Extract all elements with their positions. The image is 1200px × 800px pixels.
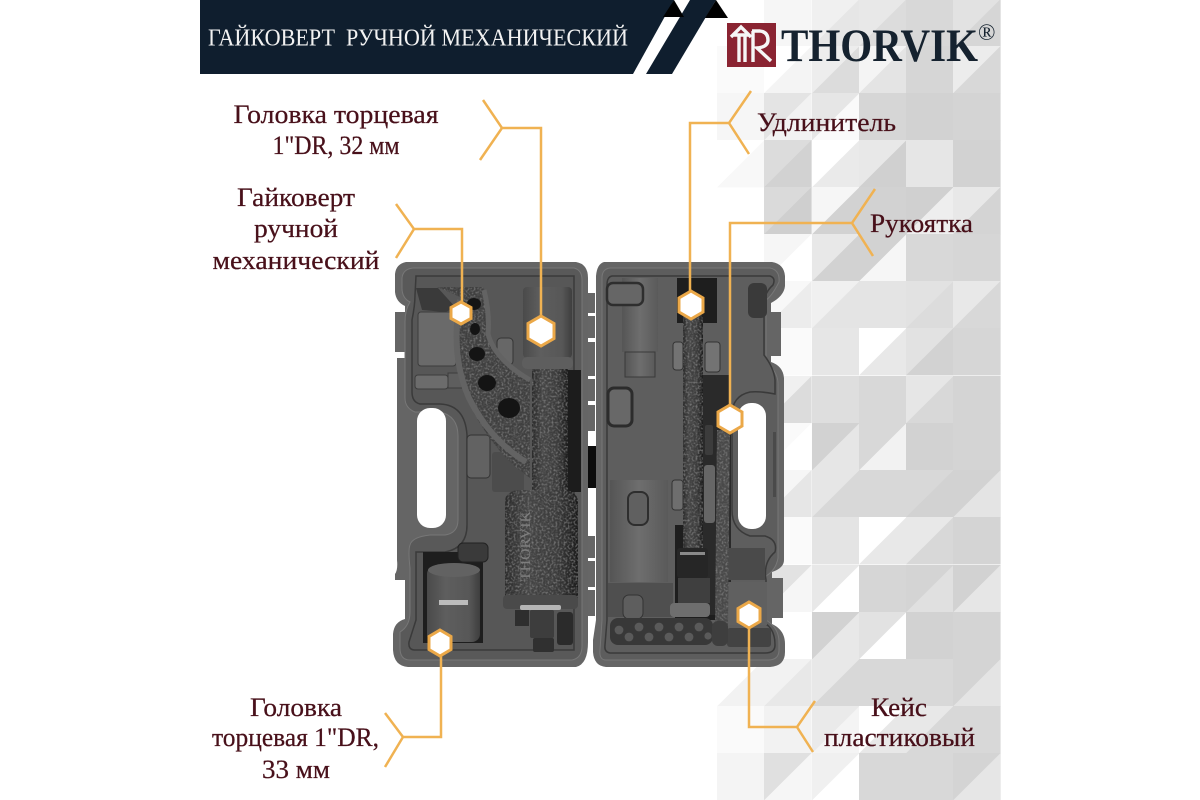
logo: Thorvik: THORVIK	[781, 20, 978, 72]
callout: socket 33 mm	[212, 630, 451, 784]
callout: socket 33 mm: торцевая 1"DR,	[212, 723, 379, 752]
callout: plastic case: пластиковый	[824, 723, 975, 752]
hydraulic arc plate	[437, 287, 530, 478]
callout: wrench: Гайковерт	[237, 183, 355, 212]
callout: handle: Рукоятка	[870, 209, 973, 238]
callout: handle	[718, 189, 973, 433]
knurled grip	[610, 618, 713, 645]
wrench shaft	[532, 369, 568, 494]
right case half	[593, 262, 785, 667]
socket imprints	[622, 278, 658, 352]
wrench square drive	[530, 610, 554, 638]
wrench cylinder	[505, 490, 578, 598]
callout: socket 32 mm: 1"DR, 32 мм	[272, 131, 400, 160]
hinges	[587, 293, 595, 616]
callout: wrench: механический	[212, 246, 380, 275]
callout: extension: Удлинитель	[757, 108, 896, 137]
left case half: THORVIK	[518, 511, 534, 581]
logo: Thorvik: ®	[978, 20, 995, 45]
right block floor	[727, 548, 765, 580]
callout: wrench	[212, 183, 471, 324]
callout: socket 32 mm	[234, 100, 554, 346]
callout: extension	[679, 91, 896, 319]
handle hole	[417, 408, 446, 528]
callout: plastic case	[738, 602, 975, 752]
callout: wrench: ручной	[254, 214, 338, 243]
ratchet handle rod	[715, 430, 730, 625]
left case half	[393, 262, 598, 667]
socket 32 mm	[523, 287, 572, 358]
panel: open plastic case with tools	[393, 262, 785, 667]
callout: plastic case: Кейс	[871, 693, 927, 722]
callout: socket 32 mm: Головка торцевая	[234, 100, 439, 129]
header banner	[200, 0, 728, 74]
title: ГАЙКОВЕРТ РУЧНОЙ МЕХАНИЧЕСКИЙ	[208, 26, 628, 52]
callout: socket 33 mm: Головка	[250, 693, 342, 722]
extension bar	[683, 300, 703, 548]
arc holes	[467, 298, 520, 418]
socket 33 mm	[423, 552, 483, 643]
handle hole	[738, 403, 766, 529]
recess blocks	[416, 288, 456, 312]
callout: socket 33 mm: 33 мм	[262, 755, 330, 784]
